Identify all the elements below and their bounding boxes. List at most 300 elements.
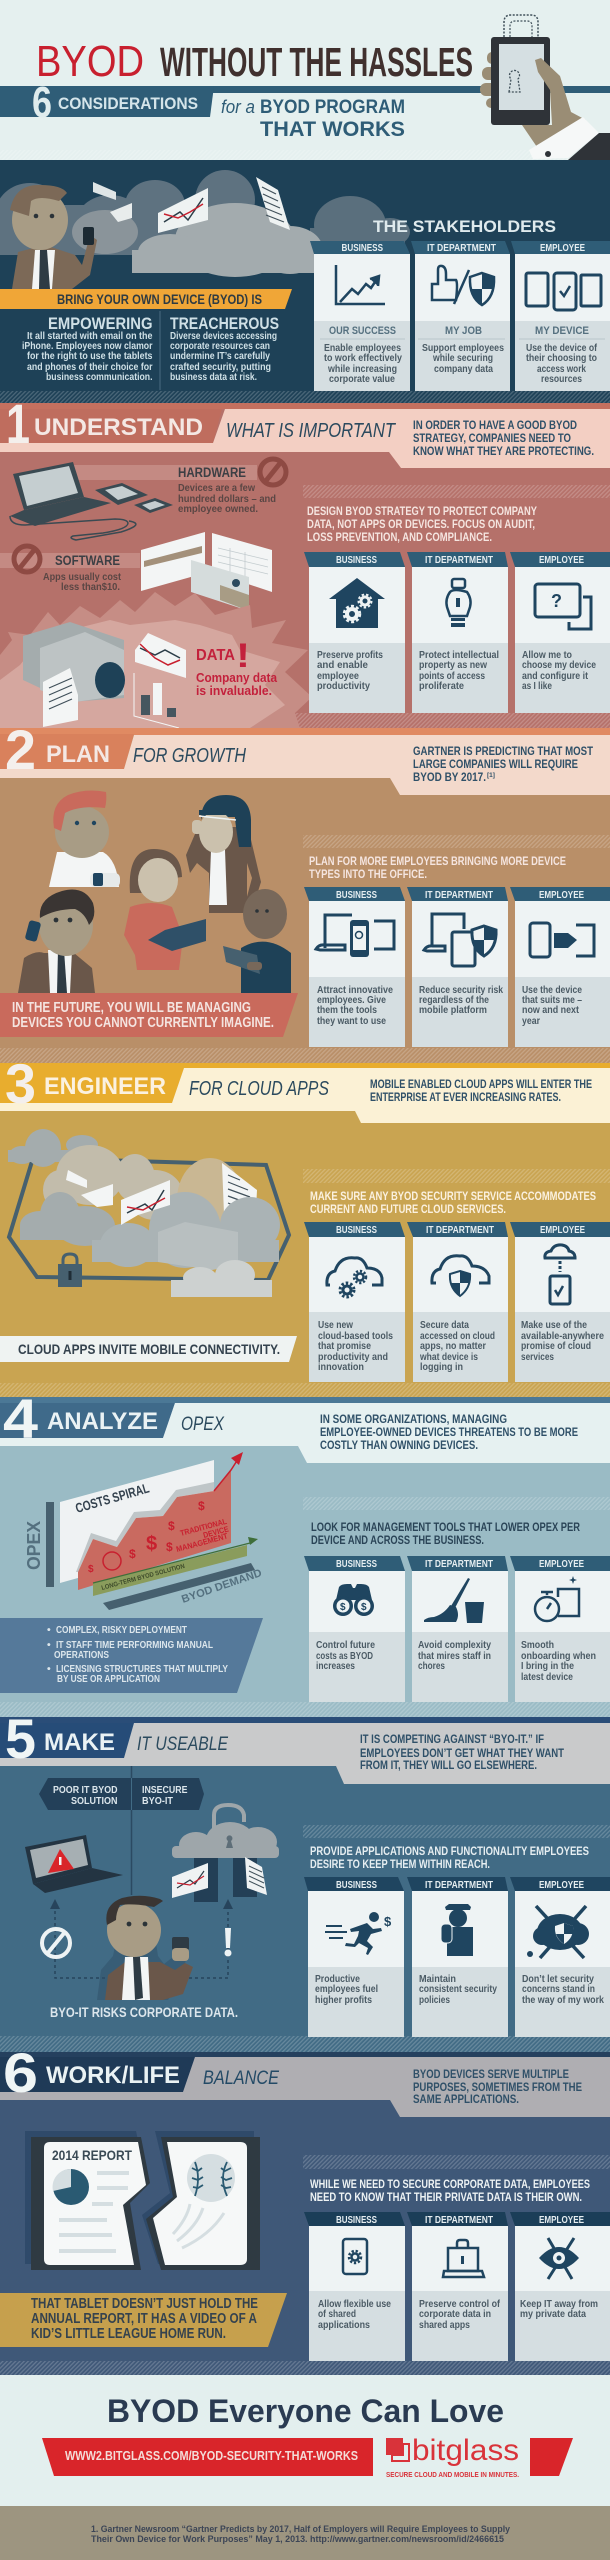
heading: make: 5 [5, 1707, 36, 1770]
card: IT stakeholder: MY JOB [445, 325, 482, 337]
card: employee: EMPLOYEE [539, 555, 584, 566]
card: business stakeholder: BUSINESS [342, 243, 383, 254]
heading: plan: PLAN [46, 741, 110, 768]
card: business: Preserve profits [317, 650, 383, 661]
card: IT department [407, 887, 508, 1047]
icon: three devices [526, 273, 601, 310]
card: IT department: Preserve control of [419, 2299, 501, 2310]
illustration: software [0, 532, 272, 611]
caption: byo-it risks: BYO-IT RISKS CORPORATE DATA. [50, 2004, 238, 2020]
card: employee stakeholder: access work [537, 364, 586, 375]
icon: padlock [58, 1254, 82, 1287]
text: understand intro: STRATEGY, COMPANIES NEED TO [413, 431, 571, 445]
text: work/life intro [413, 2067, 582, 2106]
text: provide applications [310, 1844, 589, 1871]
illustration: broken tablet [25, 2131, 260, 2270]
card: business: Productive [315, 1974, 360, 1985]
panel: footnote [0, 2506, 610, 2560]
card: business stakeholder: Enable employees [324, 343, 401, 354]
illustration: data burst: ! [236, 637, 250, 675]
text: empowering: EMPOWERING [48, 315, 152, 333]
card: business stakeholder: while increasing [327, 364, 397, 375]
card: business: cloud-based tools [318, 1331, 393, 1342]
card: IT department: Protect intellectual [419, 650, 499, 661]
heading: byod everyone can love: BYOD Everyone Can Love [107, 2393, 504, 2429]
text: empowering: It all started with email on the [27, 331, 153, 342]
card: employee: EMPLOYEE [539, 2215, 584, 2226]
text: design strategy [307, 504, 537, 544]
heading: make: IT USEABLE [137, 1734, 228, 1755]
text: plan intro: [1] [487, 772, 495, 779]
card: business [304, 1877, 404, 2037]
ribbon: tablet caption [0, 2293, 287, 2347]
card: IT stakeholder: IT DEPARTMENT [427, 243, 496, 254]
card: business [304, 887, 405, 1047]
chart: costs spiral: COSTS SPIRAL [74, 1481, 151, 1516]
chart: costs spiral: BYOD DEMAND [180, 1567, 263, 1606]
text: secure corporate data [310, 2177, 590, 2204]
card: business: that promise [318, 1341, 371, 1352]
card: business: employees. Give [317, 995, 386, 1006]
icon: hand holding phone with lock [480, 15, 610, 160]
illustration: byo-it employee [97, 1896, 193, 2000]
card: employee stakeholder: MY DEVICE [535, 325, 589, 337]
panel: footnote: 1. Gartner Newsroom “Gartner Predicts by 2017, Half of Employers will Require Employees to Supply [91, 2524, 511, 2535]
panel: 1 understand [0, 392, 610, 728]
card: IT department [407, 1556, 508, 1702]
icon: binoculars [333, 1584, 374, 1616]
ribbon: tablet caption: KID’S LITTLE LEAGUE HOME RUN. [31, 2326, 226, 2342]
icon: devices with question mark [535, 584, 591, 629]
chart: costs spiral: $ [168, 1519, 175, 1533]
card: IT department [407, 552, 508, 713]
card: IT department: Secure data [420, 1320, 469, 1331]
text: work/life intro: SAME APPLICATIONS. [413, 2092, 519, 2106]
text: plan intro [413, 744, 594, 784]
illustration: broken tablet: 2014 REPORT [52, 2147, 132, 2163]
card: employee [510, 887, 610, 1047]
card: business: BUSINESS [336, 1880, 377, 1891]
heading: plan [5, 718, 246, 781]
heading: make: MAKE [44, 1729, 115, 1756]
card: business: BUSINESS [336, 1225, 377, 1236]
chart: costs spiral: $ [129, 1547, 136, 1561]
illustration: software: Apps usually cost [43, 571, 121, 583]
panel: 2 plan [0, 718, 610, 1063]
card: employee: Smooth [521, 1640, 554, 1651]
icon: binoculars: $ [361, 1602, 367, 1613]
card: IT department: IT DEPARTMENT [425, 1559, 493, 1570]
illustration: data burst: Company data [196, 670, 278, 685]
card: IT department [407, 1222, 508, 1382]
ribbon: future devices: DEVICES YOU CANNOT CURRENTLY IMAGINE. [12, 1015, 274, 1031]
card: employee stakeholder [511, 241, 610, 391]
heading: engineer: 3 [5, 1052, 36, 1115]
chart: costs spiral: $ [88, 1564, 94, 1575]
chart: costs spiral: LONG-TERM BYOD SOLUTION [101, 1563, 186, 1592]
icon: exclamation [224, 1928, 232, 1956]
card: business: employees fuel [315, 1984, 378, 1995]
card: employee: Keep IT away from [520, 2299, 598, 2310]
card: IT department: mobile platform [419, 1005, 487, 1016]
illustration: open cloud [172, 1805, 279, 1902]
card: business stakeholder: to work effectively [324, 353, 402, 364]
panel: header [0, 0, 610, 160]
icon: device transfer [530, 923, 594, 957]
sign: two paths: BYO-IT [142, 1795, 173, 1807]
text: make sure [310, 1189, 596, 1216]
card: business: increases [316, 1661, 355, 1672]
illustration: people with devices [18, 791, 291, 993]
heading: work/life: 6 [3, 2041, 38, 2104]
heading: work/life [3, 2041, 279, 2104]
card: IT department: IT DEPARTMENT [425, 1880, 493, 1891]
icon: watch lightbulb [446, 579, 471, 627]
card: business: innovation [318, 1362, 364, 1373]
card: business: higher profits [315, 1995, 372, 2006]
card: business: Allow flexible use [318, 2299, 391, 2310]
heading: plan: FOR GROWTH [133, 745, 246, 767]
card: employee: as I like [522, 681, 552, 692]
ribbon: tablet caption: THAT TABLET DOESN’T JUST HOLD THE [31, 2296, 258, 2312]
title: BYOD [36, 37, 144, 86]
card: employee: and configure it [522, 671, 589, 682]
card: employee [510, 1877, 610, 2037]
ribbon: cloud apps: CLOUD APPS INVITE MOBILE CONNECTIVITY. [18, 1341, 280, 1357]
card: employee: onboarding when [521, 1651, 596, 1662]
chart: costs spiral: OPEX [24, 1521, 44, 1570]
illustration: hardware: employee owned. [178, 503, 258, 515]
heading: engineer: FOR CLOUD APPS [189, 1078, 330, 1100]
card: employee: EMPLOYEE [539, 1880, 584, 1891]
panel: call to action [0, 2375, 610, 2506]
card: employee: EMPLOYEE [539, 1559, 584, 1570]
text: make intro: FROM IT, THEY WILL GO ELSEWHERE. [360, 1758, 537, 1772]
card: business: them the tools [317, 1005, 377, 1016]
illustration: hardware: hundred dollars – and [178, 493, 276, 505]
logo: bitglass: bitglass [412, 2434, 519, 2467]
card: employee: available-anywhere [521, 1331, 604, 1342]
subtitle: CONSIDERATIONS [58, 94, 198, 113]
card: employee: choose my device [522, 660, 596, 671]
text: plan for more: TYPES INTO THE OFFICE. [309, 867, 427, 881]
icon: stopwatch and device [535, 1576, 579, 1621]
icon: crossed-out cloud shield [527, 1906, 589, 1958]
icon: binoculars: $ [340, 1602, 346, 1613]
card: IT department: that mires staff in [418, 1651, 491, 1662]
icon: mop and bucket [424, 1578, 484, 1623]
card: business: productivity and [318, 1352, 388, 1363]
panel: intro [0, 160, 610, 403]
ribbon: tablet caption: ANNUAL REPORT, IT HAS A VIDEO OF A [31, 2311, 257, 2327]
illustration: hardware: HARDWARE [178, 465, 246, 480]
text: empowering [22, 315, 153, 383]
card: IT department: policies [419, 1995, 450, 2006]
illustration: laptop with warning [25, 1835, 123, 1893]
person: laptop user [124, 849, 206, 970]
arrows: dashed paths [50, 1899, 233, 1978]
card: IT stakeholder [411, 241, 510, 391]
card: business: Control future [316, 1640, 375, 1651]
card: business: BUSINESS [336, 890, 377, 901]
ribbon: opex bullets: OPERATIONS [54, 1649, 109, 1661]
card: IT department: corporate data in [419, 2309, 491, 2320]
card: business: Attract innovative [317, 985, 393, 996]
card: business stakeholder: corporate value [329, 374, 395, 385]
illustration: clouds and businessman [0, 170, 410, 289]
card: business: and enable [317, 660, 368, 671]
person: watch wearer [49, 791, 120, 887]
text: engineer intro [370, 1077, 592, 1104]
icon: devices with shield [424, 914, 496, 966]
panel: 4 analyze [0, 1387, 610, 1717]
text: treacherous: crafted security, putting [170, 362, 271, 373]
chart: costs spiral [24, 1452, 263, 1610]
card: employee stakeholder: EMPLOYEE [540, 243, 585, 254]
card: business: BUSINESS [336, 555, 377, 566]
card: business: Use new [318, 1320, 353, 1331]
card: business: employee [317, 671, 359, 682]
text: management tools: DEVICE AND ACROSS THE BUSINESS. [311, 1533, 484, 1547]
text: design strategy: DATA, NOT APPS OR DEVICES. FOCUS ON AUDIT, [307, 517, 535, 531]
card: employee: that suits me – [522, 995, 582, 1006]
band: considerations [0, 86, 214, 117]
icon: baseball [187, 2154, 235, 2202]
heading: analyze: 4 [3, 1387, 38, 1450]
card: business: BUSINESS [336, 1559, 377, 1570]
heading: understand: 1 [6, 392, 30, 455]
text: treacherous: corporate resources can [170, 341, 270, 352]
text: empowering: iPhone. Employees now clamor [22, 341, 153, 352]
ribbon: opex bullets: IT STAFF TIME PERFORMING MANUAL [56, 1639, 213, 1651]
sign: two paths: SOLUTION [71, 1795, 118, 1807]
icon: running man [325, 1912, 392, 1955]
card: business: BUSINESS [336, 2215, 377, 2226]
chart: costs spiral: DEVICE [202, 1524, 230, 1540]
card: employee [510, 552, 610, 713]
card: business: applications [318, 2320, 370, 2331]
card: IT department: regardless of the [419, 995, 489, 1006]
sign: two paths: INSECURE [142, 1784, 188, 1796]
card: IT department: Maintain [419, 1974, 456, 1985]
card: employee: my private data [520, 2309, 586, 2320]
text: design strategy: LOSS PREVENTION, AND COMPLIANCE. [307, 530, 492, 544]
ribbon: opex bullets: • [47, 1639, 51, 1651]
text: work/life intro: BYOD DEVICES SERVE MULTIPLE [413, 2067, 569, 2081]
ribbon: bring your own device: BRING YOUR OWN DEVICE (BYOD) IS [57, 292, 262, 307]
icon: cloud with shield [432, 1256, 489, 1296]
subtitle [32, 78, 405, 141]
panel: 5 make [0, 1707, 610, 2052]
subtitle: for a [221, 97, 255, 117]
ribbon: opex bullets [0, 1618, 263, 1693]
chart: costs spiral: $ [146, 1533, 157, 1555]
chart: costs spiral: MANAGEMENT [175, 1531, 229, 1554]
card: business [304, 1556, 405, 1702]
heading: work/life: BALANCE [203, 2068, 279, 2089]
card: IT department: IT DEPARTMENT [426, 1225, 494, 1236]
chart: costs spiral: TRADITIONAL [179, 1517, 228, 1538]
subtitle: BYOD PROGRAM [260, 97, 405, 118]
card: IT department: Reduce security risk [419, 985, 503, 996]
text: understand intro [413, 418, 594, 458]
card: IT department: apps, no matter [420, 1341, 486, 1352]
chart: costs spiral: $ [198, 1499, 205, 1513]
text: treacherous [170, 315, 279, 383]
card: employee: EMPLOYEE [539, 890, 584, 901]
text: make intro: IT IS COMPETING AGAINST “BYO-IT.” IF [360, 1732, 544, 1746]
illustration: data burst: is invaluable. [196, 683, 272, 698]
card: business [304, 2212, 405, 2361]
card: employee stakeholder: resources [541, 374, 582, 385]
logo: bitglass [386, 2434, 519, 2479]
card: business: productivity [317, 681, 370, 692]
heading: understand: UNDERSTAND [34, 414, 203, 441]
icon: laptop phone tablet [316, 915, 394, 957]
heading: analyze: ANALYZE [47, 1408, 158, 1435]
text: plan for more [309, 854, 566, 881]
icon: no sign [14, 546, 40, 572]
icon: cloud to phone [545, 1245, 575, 1304]
card: employee: now and next [522, 1005, 580, 1016]
title [36, 37, 473, 86]
card: employee stakeholder: their choosing to [526, 353, 597, 364]
card: employee: I bring in the [521, 1661, 574, 1672]
person: tablet user [223, 889, 291, 993]
icon: no sign [42, 1929, 70, 1957]
card: employee: services [521, 1352, 554, 1363]
icon: crossed-out eye [539, 2238, 579, 2279]
card: business: they want to use [317, 1016, 386, 1027]
card: business: costs as BYOD [316, 1651, 373, 1662]
text: analyze intro: IN SOME ORGANIZATIONS, MANAGING [320, 1412, 507, 1426]
icon: laptop padlock [443, 2240, 484, 2277]
card: employee stakeholder: Use the device of [526, 343, 598, 354]
card: IT department: logging in [420, 1362, 463, 1373]
card: IT department: property as new [419, 660, 487, 671]
text: management tools [311, 1520, 580, 1547]
heading: engineer: ENGINEER [44, 1073, 166, 1100]
illustration: hardware [10, 459, 286, 540]
heading: work/life: WORK/LIFE [46, 2062, 180, 2089]
card: employee [510, 1556, 610, 1702]
subtitle: 6 [32, 78, 52, 127]
heading: make [5, 1707, 228, 1770]
icon: cloud with gears [327, 1258, 382, 1297]
person: phone caller [18, 890, 95, 993]
ribbon: future devices [0, 993, 298, 1037]
illustration: software: less than$10. [61, 581, 120, 593]
ribbon: future devices: IN THE FUTURE, YOU WILL BE MANAGING [12, 1000, 251, 1016]
heading: analyze [3, 1387, 225, 1450]
text: treacherous: Diverse devices accessing [170, 331, 277, 342]
card: business stakeholder: OUR SUCCESS [329, 325, 396, 337]
sign: two paths: POOR IT BYOD [53, 1784, 118, 1796]
text: provide applications: DESIRE TO KEEP THEM WITHIN REACH. [310, 1857, 490, 1871]
card: business [304, 1222, 405, 1382]
card: employee: EMPLOYEE [540, 1225, 585, 1236]
illustration: software: SOFTWARE [55, 553, 120, 568]
illustration: hardware: Devices are a few [178, 482, 256, 494]
ribbon: cloud apps [0, 1336, 297, 1362]
heading: understand: WHAT IS IMPORTANT [226, 420, 396, 442]
heading: understand [6, 392, 396, 455]
banner: url [42, 2438, 373, 2476]
card: business: of shared [318, 2309, 356, 2320]
text: make intro [360, 1732, 565, 1772]
card: employee: promise of cloud [521, 1341, 591, 1352]
sign: two paths [39, 1778, 204, 1810]
card: IT department: IT DEPARTMENT [425, 890, 493, 901]
card: IT department: accessed on cloud [420, 1331, 495, 1342]
panel: footnote: Their Own Device for Work Purposes” May 1, 2013. http://www.gartner.com/newsroom/id/2466615 [91, 2534, 505, 2545]
logo: bitglass: SECURE CLOUD AND MOBILE IN MINUTES. [386, 2472, 519, 2479]
text: treacherous: undermine IT’s carefully [170, 351, 270, 362]
panel: 6 work/life [0, 2041, 610, 2375]
subtitle: THAT WORKS [260, 118, 405, 141]
card: IT department: proliferate [419, 681, 464, 692]
card: employee: Use the device [522, 985, 582, 996]
icon: devices with question mark: ? [551, 591, 562, 611]
card: IT stakeholder: company data [434, 364, 493, 375]
chart: pie [53, 2169, 89, 2205]
person: smart glasses wearer [186, 795, 261, 913]
card: IT department: Avoid complexity [418, 1640, 491, 1651]
card: employee: latest device [521, 1672, 573, 1683]
text: design strategy: DESIGN BYOD STRATEGY TO PROTECT COMPANY [307, 504, 537, 518]
card: IT stakeholder: while securing [432, 353, 493, 364]
icon: thumbs up and shield [432, 266, 494, 305]
text: empowering: and phones of their choice for [27, 362, 153, 373]
card: employee: Don’t let security [522, 1974, 594, 1985]
card: business [304, 552, 405, 713]
card: IT department: points of access [419, 671, 485, 682]
ribbon: opex bullets: COMPLEX, RISKY DEPLOYMENT [56, 1624, 187, 1636]
chart: costs spiral: $ [166, 1540, 173, 1554]
icon: running man: $ [384, 1914, 392, 1929]
card: employee: year [522, 1016, 540, 1027]
card: IT department [407, 2212, 508, 2361]
text: make sure: CURRENT AND FUTURE CLOUD SERVICES. [310, 1202, 506, 1216]
ribbon: opex bullets: • [47, 1624, 51, 1636]
icon: no sign [260, 459, 286, 485]
card: IT department: IT DEPARTMENT [425, 2215, 493, 2226]
ribbon: opex bullets: LICENSING STRUCTURES THAT MULTIPLY [56, 1663, 228, 1675]
text: treacherous: TREACHEROUS [170, 315, 279, 333]
text: empowering: business communication. [46, 372, 153, 383]
card: employee: concerns stand in [522, 1984, 595, 1995]
card: employee [510, 1222, 610, 1382]
text: treacherous: business data at risk. [170, 372, 257, 383]
panel: 3 engineer [0, 1052, 610, 1397]
icon: growth chart [336, 265, 385, 304]
card: IT department [407, 1877, 508, 2037]
text: analyze intro: COSTLY THAN OWNING DEVICES. [320, 1438, 478, 1452]
card: IT stakeholder: Support employees [422, 343, 504, 354]
icon: security guard [441, 1904, 473, 1956]
card: employee: Allow me to [522, 650, 572, 661]
heading: analyze: OPEX [181, 1414, 225, 1435]
illustration: data burst: DATA [196, 647, 235, 664]
card: employee [510, 2212, 610, 2361]
card: business stakeholder [310, 241, 410, 391]
card: IT department: shared apps [419, 2320, 470, 2331]
heading: engineer [5, 1052, 330, 1115]
banner: url: WWW2.BITGLASS.COM/BYOD-SECURITY-THAT-WORKS [65, 2449, 358, 2463]
heading: the stakeholders: THE STAKEHOLDERS [373, 217, 556, 236]
ribbon: opex bullets: • [47, 1663, 51, 1675]
text: analyze intro [320, 1412, 578, 1452]
